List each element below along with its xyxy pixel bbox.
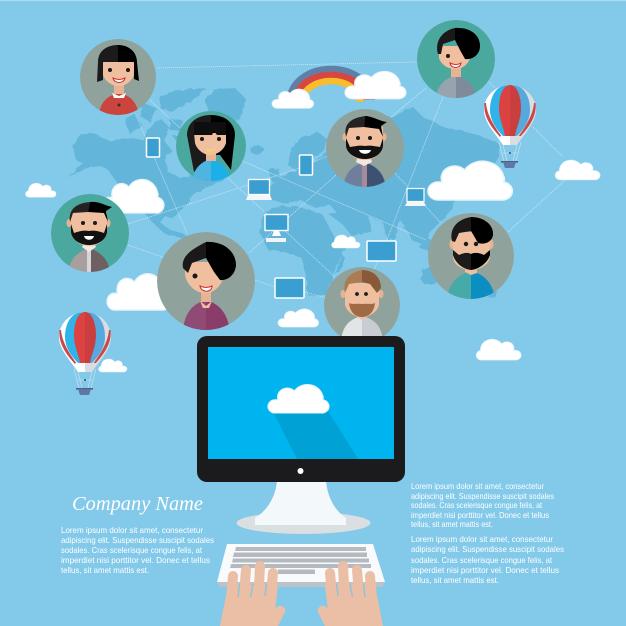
map: Baffin and Greenland bbox=[160, 88, 247, 128]
rainbow: outer band bbox=[290, 69, 372, 100]
map: Australia bbox=[420, 266, 444, 284]
avatar: woman top right bbox=[417, 20, 495, 98]
monitor screen bbox=[208, 347, 394, 459]
device: laptop right bbox=[405, 188, 426, 206]
cloud shadow on screen bbox=[271, 406, 358, 459]
avatar: bearded man right bbox=[428, 213, 514, 299]
map: Britain bbox=[268, 168, 282, 182]
text block right lower: tellus, sit amet mattis est. bbox=[411, 575, 499, 585]
map: South-East Asia islands bbox=[402, 226, 446, 252]
cloud bbox=[107, 274, 170, 310]
avatar: woman in purple bbox=[157, 232, 255, 332]
rainbow: yellow band bbox=[302, 81, 360, 102]
cloud bbox=[476, 339, 521, 360]
map: Africa bbox=[260, 206, 350, 295]
computer bbox=[197, 336, 405, 534]
text block right lower bbox=[411, 534, 564, 585]
text block right lower: imperdiet nisi porttitor vel. Donec et tellus bbox=[411, 565, 559, 575]
cloud bbox=[345, 71, 406, 99]
right hand bbox=[318, 566, 383, 626]
monitor frame bbox=[197, 336, 405, 482]
cloud bbox=[555, 160, 600, 180]
keyboard body bbox=[217, 544, 385, 582]
avatar: brown-haired man bbox=[324, 267, 400, 343]
hands bbox=[220, 566, 383, 626]
map: Eurasia bbox=[268, 107, 500, 245]
keyboard shadow bbox=[217, 582, 385, 587]
monitor base bbox=[236, 512, 370, 534]
cloud bbox=[102, 179, 164, 213]
device: desktop bbox=[265, 214, 288, 242]
left hand bbox=[220, 566, 286, 626]
text block right upper: adipiscing elit. Suspendisse suscipit sodales bbox=[411, 492, 554, 501]
keyboard bbox=[217, 544, 385, 587]
cloud bbox=[272, 89, 314, 108]
cloud bbox=[99, 359, 127, 372]
hot air balloon left bbox=[59, 312, 111, 395]
map: Madagascar bbox=[335, 254, 345, 274]
text block right lower: Lorem ipsum dolor sit amet, consectetur bbox=[411, 534, 553, 544]
text block right lower: sodales. Cras scelerisque congue felis, at bbox=[411, 555, 553, 565]
text block left: tellus, sit amet mattis est. bbox=[61, 565, 149, 575]
device: wide screen right bbox=[367, 241, 396, 261]
cloud bbox=[278, 309, 319, 327]
world map bbox=[68, 88, 500, 299]
text block right upper: imperdiet nisi porttitor vel. Donec et tellus bbox=[411, 511, 549, 520]
device: wide screen left bbox=[275, 278, 304, 298]
connection lines bbox=[128, 62, 565, 298]
map: Arctic islands bbox=[125, 102, 186, 146]
text block left: imperdiet nisi porttitor vel. Donec et tellus bbox=[61, 555, 210, 565]
avatar: bearded man on teal bbox=[51, 194, 129, 272]
avatar: woman with long hair bbox=[176, 111, 246, 182]
text block right upper: tellus, sit amet mattis est. bbox=[411, 520, 493, 529]
text block right lower: adipiscing elit. Suspendisse suscipit sodales bbox=[411, 544, 564, 554]
map: Scandinavia bbox=[288, 132, 328, 170]
text block right upper bbox=[411, 482, 554, 529]
hot air balloon right bbox=[484, 85, 536, 168]
avatar: woman in red bbox=[80, 39, 156, 115]
text block left: Lorem ipsum dolor sit amet, consectetur bbox=[61, 525, 203, 535]
rainbow: red band bbox=[296, 75, 366, 100]
device: laptop left bbox=[246, 180, 272, 200]
text block left: sodales. Cras scelerisque congue felis, at bbox=[61, 545, 203, 555]
monitor stand bbox=[255, 480, 346, 525]
map: New Zealand bbox=[488, 290, 498, 299]
device: tablet centre bbox=[300, 155, 312, 175]
text block right upper: sodales. Cras scelerisque congue felis, at bbox=[411, 501, 543, 510]
text block right upper: Lorem ipsum dolor sit amet, consectetur bbox=[411, 482, 544, 491]
cloud bbox=[428, 161, 512, 200]
map: North America bbox=[68, 128, 225, 240]
avatar: bearded man centre bbox=[326, 109, 404, 188]
text block left bbox=[61, 525, 214, 575]
cloud bbox=[26, 183, 56, 197]
map: Iceland bbox=[250, 146, 264, 154]
device: tablet left bbox=[146, 138, 160, 157]
cloud bbox=[332, 235, 360, 248]
company name: Company Name bbox=[72, 493, 203, 515]
keyboard keys bbox=[230, 547, 371, 574]
text block left: adipiscing elit. Suspendisse suscipit sodales bbox=[61, 535, 214, 545]
power light bbox=[298, 468, 304, 474]
cloud on screen bbox=[268, 385, 329, 413]
rainbow bbox=[290, 69, 372, 102]
